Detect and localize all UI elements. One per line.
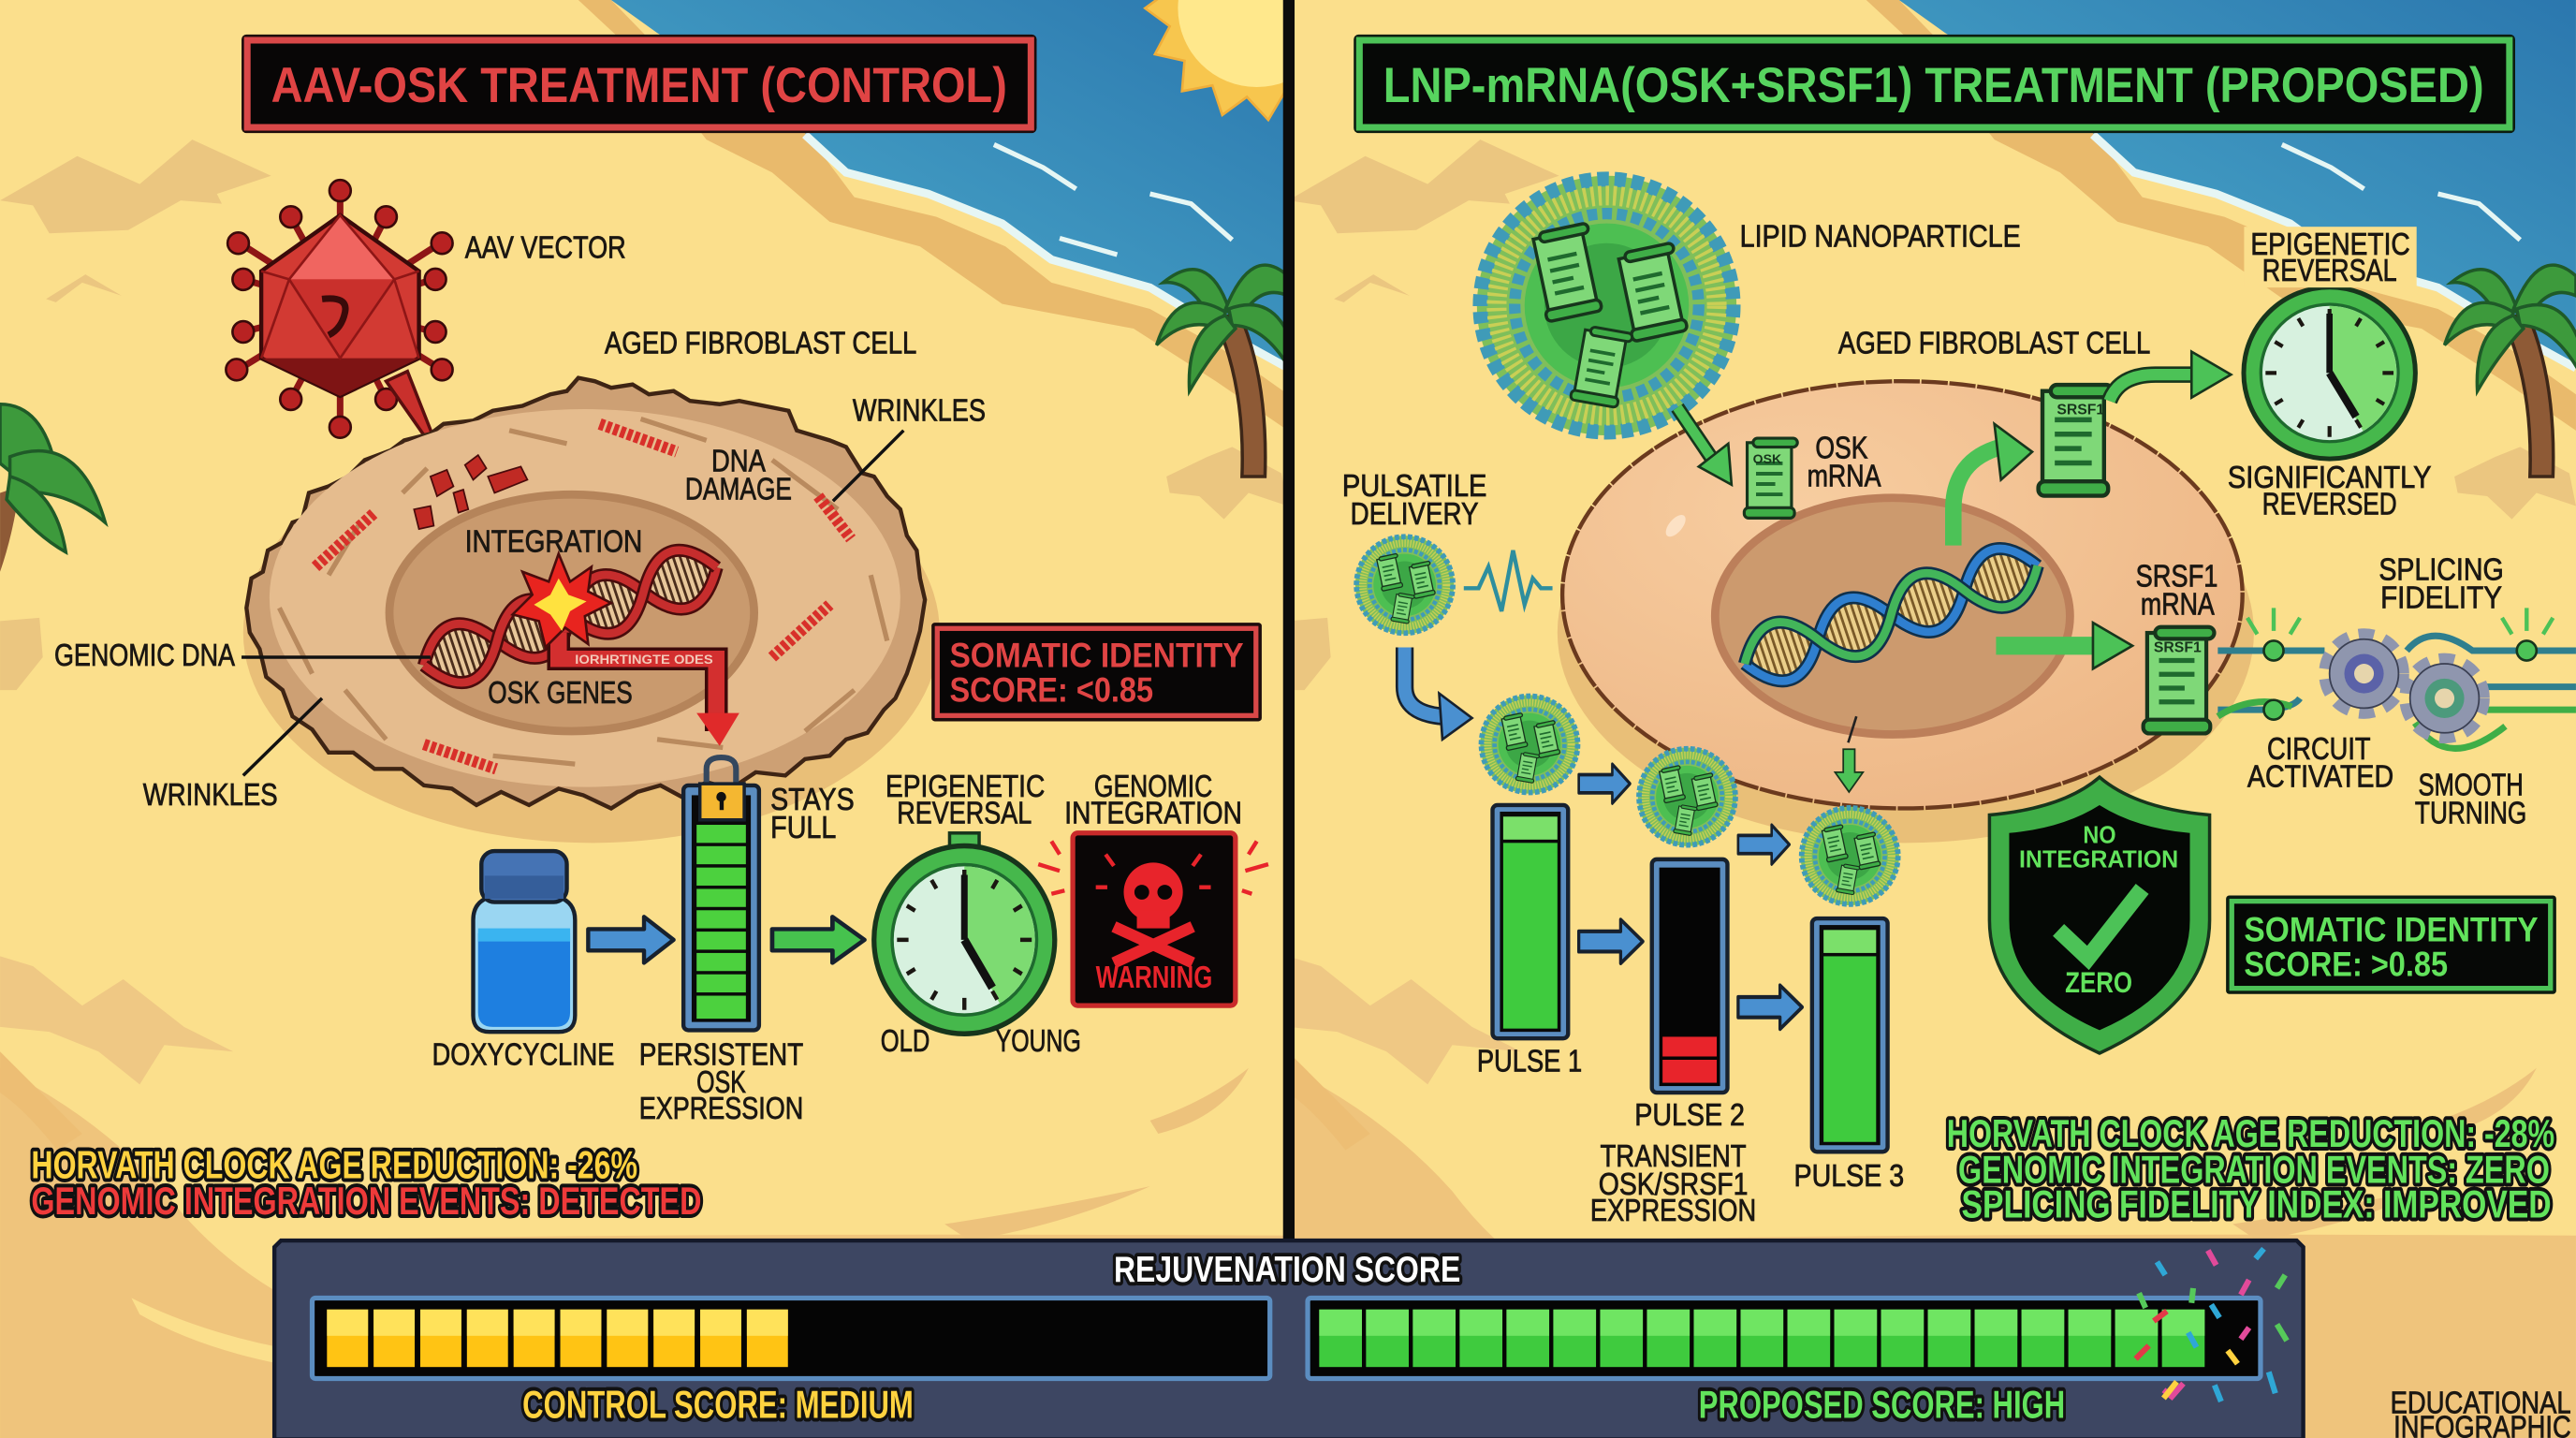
icon: SRSF1 mRNA scroll bbox=[2144, 627, 2214, 733]
label: wrinkles bottom bbox=[143, 698, 322, 813]
panel: AAV-OSK control bbox=[31, 35, 1268, 1223]
label: epigenetic reversal proposed: EPIGENETIC bbox=[2250, 227, 2410, 262]
label: smooth turning: SMOOTH bbox=[2418, 768, 2524, 802]
label: pulsatile delivery: DELIVERY bbox=[1351, 497, 1479, 532]
icon: OSK mRNA scroll bbox=[1744, 438, 1797, 518]
label: doxycycline: DOXYCYCLINE bbox=[432, 1037, 614, 1072]
stats: control: GENOMIC INTEGRATION EVENTS: DETECTED bbox=[31, 1179, 701, 1223]
callout: somatic identity proposed: SOMATIC IDENTITY bbox=[2244, 911, 2539, 949]
heading: rejuvenation score: REJUVENATION SCORE bbox=[1114, 1250, 1460, 1290]
label: stays full bbox=[770, 783, 855, 845]
label: transient expression: TRANSIENT bbox=[1600, 1139, 1747, 1174]
bar: pulse 3 bbox=[1812, 918, 1888, 1152]
arrow: delivery to pulses bbox=[1405, 647, 1472, 740]
callout: somatic identity control bbox=[931, 623, 1262, 721]
label: OSK genes: OSK GENES bbox=[488, 676, 633, 711]
icon: small green arrow below nucleus bbox=[1835, 716, 1863, 792]
label: transient expression bbox=[1590, 1139, 1756, 1228]
icon: epigenetic clock control bbox=[874, 833, 1055, 1034]
label: pulsatile delivery: PULSATILE bbox=[1342, 469, 1486, 504]
label: SRSF1 mRNA: SRSF1 bbox=[2136, 560, 2217, 594]
stats: control bbox=[31, 1142, 701, 1223]
label: AAV vector: AAV VECTOR bbox=[465, 231, 626, 266]
icon: epigenetic clock proposed bbox=[2244, 287, 2415, 459]
icon: SRSF1 scroll bbox=[2039, 385, 2113, 496]
arrow: expression to clock bbox=[772, 917, 864, 962]
label: circuit activated: CIRCUIT bbox=[2267, 732, 2371, 767]
icon: no integration shield: NO bbox=[2083, 820, 2116, 848]
label: aged fibroblast cell: AGED FIBROBLAST CELL bbox=[605, 326, 916, 360]
label: SRSF1 mRNA bbox=[2136, 560, 2217, 622]
label: OSK mRNA bbox=[1808, 432, 1881, 493]
label: stays full: FULL bbox=[770, 811, 836, 845]
confetti bbox=[2136, 1249, 2287, 1401]
panel: LNP-mRNA proposed bbox=[1342, 35, 2576, 1228]
arrow: nucleus to SRSF1 scroll bbox=[1954, 424, 2032, 546]
callout: somatic identity proposed: SCORE: >0.85 bbox=[2244, 945, 2448, 983]
splicing circuit bbox=[2217, 608, 2576, 748]
label: persistent OSK expression: EXPRESSION bbox=[639, 1092, 803, 1126]
label: SRSF1 mRNA: mRNA bbox=[2141, 587, 2215, 622]
icon: left palm tree bbox=[0, 404, 105, 572]
label: persistent OSK expression: OSK bbox=[696, 1065, 746, 1100]
icon: no integration shield: INTEGRATION bbox=[2019, 845, 2178, 873]
background: right beach panel bbox=[1288, 0, 2576, 1438]
icon: AAV vector virus bbox=[226, 180, 453, 463]
label: wrinkles top: WRINKLES bbox=[853, 393, 986, 428]
bar: pulse 1 bbox=[1493, 805, 1568, 1038]
panel: rejuvenation score bbox=[274, 1240, 2304, 1438]
label: lipid nanoparticle: LIPID NANOPARTICLE bbox=[1740, 219, 2021, 254]
label: genomic DNA: GENOMIC DNA bbox=[54, 638, 236, 673]
icon: gear small bbox=[2407, 661, 2482, 736]
bar: pulse 2 bbox=[1652, 859, 1727, 1093]
nucleus bbox=[1715, 498, 2070, 734]
label: OSK mRNA: mRNA bbox=[1808, 459, 1881, 493]
nucleus bbox=[389, 494, 754, 731]
icon: no integration shield: ZERO bbox=[2065, 965, 2132, 999]
callout: somatic identity proposed bbox=[2226, 895, 2556, 994]
icon: sun bbox=[1145, 0, 1336, 120]
stats: control: HORVATH CLOCK AGE REDUCTION: -26% bbox=[31, 1142, 637, 1186]
arrow: pulse 1 to 2 bbox=[1579, 919, 1643, 963]
label: aged fibroblast cell: AGED FIBROBLAST CELL bbox=[1838, 326, 2150, 360]
label: DNA damage: DNA bbox=[711, 445, 767, 479]
icon: SRSF1 mRNA scroll: SRSF1 bbox=[2154, 640, 2202, 656]
callout: somatic identity control: SOMATIC IDENTITY bbox=[949, 637, 1244, 675]
label: integration: INTEGRATION bbox=[465, 525, 642, 560]
label: circuit activated bbox=[2247, 732, 2393, 795]
icon: pulse LNP 1 bbox=[1480, 695, 1579, 794]
title: control bbox=[242, 35, 1036, 133]
icon: pulse waveform bbox=[1464, 550, 1553, 611]
label: epigenetic reversal control bbox=[886, 770, 1045, 830]
label: persistent OSK expression bbox=[639, 1037, 803, 1126]
label: stays full: STAYS bbox=[770, 783, 855, 817]
label: wrinkles bottom: WRINKLES bbox=[143, 778, 278, 813]
arrow: LNP to OSK mRNA bbox=[1677, 407, 1732, 485]
label: DNA damage: DAMAGE bbox=[685, 473, 792, 507]
label: transient expression: EXPRESSION bbox=[1590, 1194, 1756, 1228]
icon: warning sign bbox=[1038, 833, 1268, 1005]
arrow: pulse 1 to 2 top bbox=[1579, 764, 1630, 803]
divider between panels bbox=[1283, 0, 1295, 1242]
label: old: OLD bbox=[881, 1024, 929, 1059]
aged fibroblast cell bbox=[243, 378, 940, 843]
icon: SRSF1 scroll: SRSF1 bbox=[2056, 402, 2104, 418]
label: wrinkles top bbox=[833, 393, 986, 501]
label: circuit activated: ACTIVATED bbox=[2247, 760, 2393, 795]
label: epigenetic reversal proposed bbox=[2244, 227, 2417, 288]
icon: doxycycline bottle bbox=[474, 851, 575, 1032]
integration arrow bbox=[559, 633, 716, 731]
viral fragments bbox=[414, 455, 527, 529]
footer note bbox=[2391, 1386, 2571, 1438]
label: smooth turning: TURNING bbox=[2415, 796, 2526, 830]
icon: padlock bbox=[700, 757, 744, 820]
DNA helix with integration burst: IORHRTINGTE ODES bbox=[575, 652, 713, 667]
DNA helix proposed bbox=[1735, 537, 2047, 692]
label: splicing fidelity: SPLICING bbox=[2378, 553, 2504, 588]
label: transient expression: OSK/SRSF1 bbox=[1599, 1167, 1748, 1202]
arrow: pulse 2 to 3 top bbox=[1738, 825, 1790, 864]
bar: proposed score bbox=[1308, 1298, 2261, 1378]
icon: no integration shield bbox=[1989, 777, 2210, 1053]
stats: proposed bbox=[1947, 1111, 2554, 1225]
label: genomic integration bbox=[1064, 770, 1242, 830]
arrow: nucleus to SRSF1 mRNA bbox=[1996, 623, 2132, 668]
icon: pulse LNP 2 bbox=[1638, 748, 1736, 846]
label: pulse 1: PULSE 1 bbox=[1477, 1044, 1582, 1078]
arrow: pulse 2 to 3 bbox=[1738, 985, 1802, 1029]
icon: OSK mRNA scroll: OSK bbox=[1753, 451, 1781, 466]
rejuvenated cell bbox=[1558, 381, 2254, 843]
label: persistent OSK expression: PERSISTENT bbox=[639, 1037, 803, 1072]
bar: control score bbox=[313, 1298, 1270, 1378]
label: splicing fidelity: FIDELITY bbox=[2380, 580, 2502, 615]
title: proposed bbox=[1354, 35, 2515, 133]
label: DNA damage bbox=[685, 445, 792, 507]
label: pulse 2: PULSE 2 bbox=[1634, 1098, 1745, 1133]
label: genomic integration: GENOMIC bbox=[1094, 770, 1212, 804]
burst bbox=[513, 553, 611, 647]
label: OSK mRNA: OSK bbox=[1815, 432, 1868, 466]
label: proposed score: PROPOSED SCORE: HIGH bbox=[1699, 1383, 2065, 1427]
icon: lipid nanoparticle bbox=[1477, 176, 1736, 435]
label: significantly reversed: SIGNIFICANTLY bbox=[2228, 461, 2431, 495]
icon: warning sign: WARNING bbox=[1096, 961, 1212, 995]
label: epigenetic reversal proposed: REVERSAL bbox=[2262, 254, 2397, 288]
label: control score: CONTROL SCORE: MEDIUM bbox=[522, 1383, 914, 1427]
icon: pulse LNP 3 bbox=[1801, 807, 1899, 905]
arrow: doxycycline to expression bbox=[588, 917, 674, 962]
label: epigenetic reversal control: EPIGENETIC bbox=[886, 770, 1045, 804]
icon: small LNP delivery bbox=[1355, 536, 1454, 634]
label: significantly reversed bbox=[2228, 461, 2431, 521]
label: young: YOUNG bbox=[996, 1024, 1081, 1059]
DNA damage spots bbox=[315, 424, 851, 769]
label: epigenetic reversal control: REVERSAL bbox=[897, 796, 1032, 830]
bar: persistent OSK expression bbox=[683, 785, 759, 1030]
DNA helix with integration burst bbox=[415, 539, 739, 746]
label: genomic integration: INTEGRATION bbox=[1064, 796, 1242, 830]
arrow: scroll to clock bbox=[2110, 352, 2231, 401]
label: splicing fidelity bbox=[2378, 553, 2504, 615]
label: significantly reversed: REVERSED bbox=[2262, 487, 2397, 521]
label: smooth turning bbox=[2415, 768, 2526, 830]
title: control: AAV-OSK TREATMENT (CONTROL) bbox=[271, 58, 1007, 113]
label: pulsatile delivery bbox=[1342, 469, 1486, 532]
callout: somatic identity control: SCORE: <0.85 bbox=[949, 670, 1153, 709]
background: left beach panel bbox=[0, 0, 1336, 1438]
label: pulse 3: PULSE 3 bbox=[1794, 1159, 1904, 1194]
icon: gear large bbox=[2326, 636, 2402, 712]
